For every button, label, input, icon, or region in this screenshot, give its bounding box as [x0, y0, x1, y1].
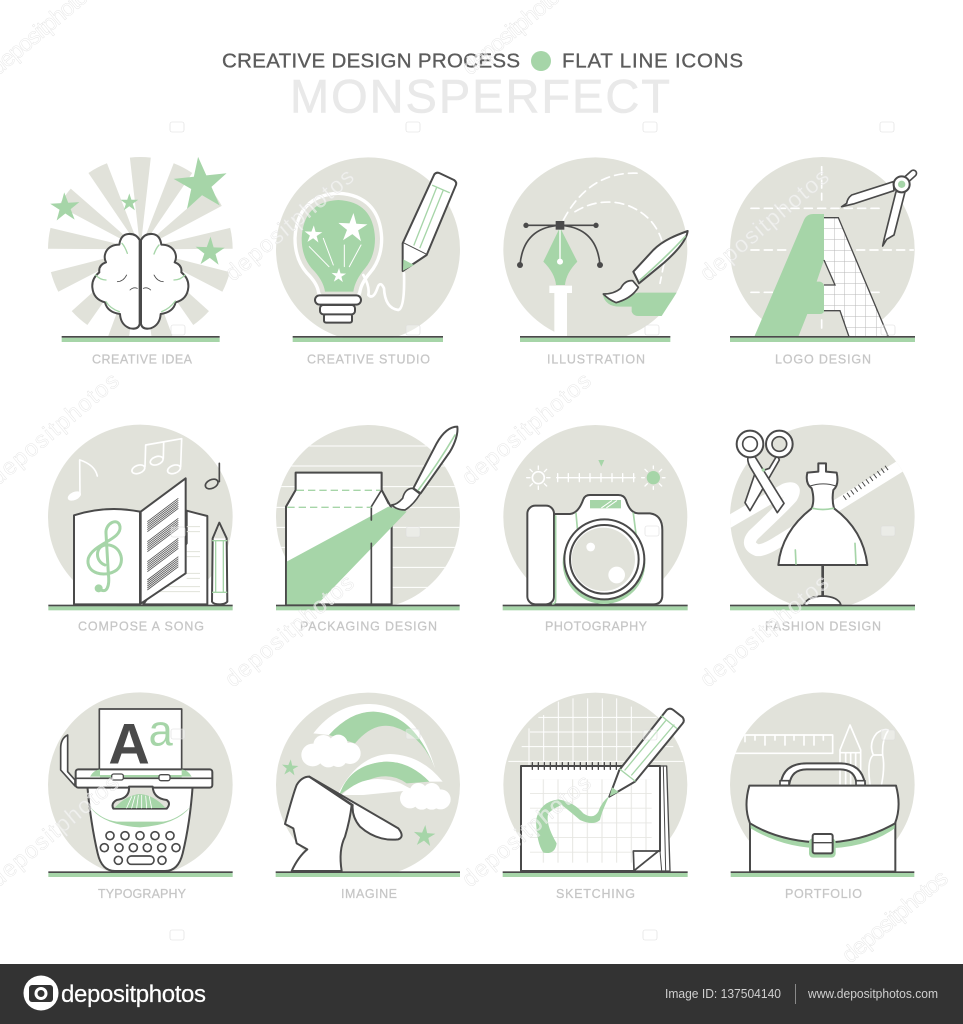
label: creative studio: CREATIVE STUDIO — [307, 352, 430, 366]
label: typography: TYPOGRAPHY — [98, 887, 187, 901]
brand wordmark: depositphotos — [61, 981, 206, 1008]
footer bar — [0, 964, 963, 1024]
title: subtitle line — [222, 50, 743, 72]
ground line — [520, 336, 670, 342]
paper sheet: A — [108, 712, 150, 776]
rainbows — [313, 704, 443, 795]
label: sketching: SKETCHING — [556, 887, 635, 901]
panel: imagine — [276, 693, 460, 877]
panel: compose a song — [48, 425, 233, 610]
green squiggle — [536, 796, 609, 853]
background circle — [276, 157, 460, 341]
label: imagine: IMAGINE — [341, 887, 397, 901]
icon: light bulb — [302, 200, 375, 323]
background circle — [730, 425, 915, 609]
title: subtitle line: FLAT LINE ICONS — [562, 50, 743, 72]
panel: portfolio — [730, 692, 915, 877]
ground line — [293, 336, 443, 342]
ground line — [730, 336, 915, 342]
icon: carton — [286, 473, 407, 604]
watermark: depositphotos — [695, 569, 834, 692]
watermark: depositphotos — [220, 163, 359, 286]
icon: paint brush — [603, 231, 688, 303]
icon: typewriter — [61, 735, 212, 871]
letter A green half — [754, 214, 824, 337]
panel: typography — [48, 692, 233, 877]
ground line — [503, 871, 688, 877]
watermark: depositphotos — [457, 769, 596, 892]
ground line — [62, 336, 220, 342]
icon: compass — [842, 173, 913, 246]
label: logo design: LOGO DESIGN — [775, 352, 871, 366]
panel: sketching — [503, 693, 688, 877]
stars — [50, 154, 230, 265]
dashed arcs — [563, 173, 664, 283]
tape measure — [723, 460, 910, 550]
exposure scale — [527, 460, 665, 489]
music notes — [66, 439, 220, 503]
background circle — [730, 692, 915, 877]
ruler, pencil and brush outlines — [730, 725, 888, 784]
panel: creative studio — [276, 157, 460, 342]
brain — [92, 234, 188, 329]
panel: fashion design — [723, 425, 915, 610]
paint stroke — [603, 293, 677, 316]
sunburst rays — [47, 157, 233, 341]
background circle with grid — [503, 692, 688, 839]
icon: pencil — [212, 523, 227, 604]
cord — [363, 273, 404, 310]
ground line — [48, 871, 233, 877]
icon: scissors — [737, 431, 793, 513]
icon: paint brush — [392, 427, 458, 510]
label: creative idea: CREATIVE IDEA — [92, 352, 193, 366]
guide lines — [751, 167, 913, 333]
panel: creative idea — [47, 154, 233, 342]
icon: pen nib — [517, 221, 603, 336]
panel: photography — [503, 425, 688, 610]
background circle — [730, 157, 915, 342]
paper sheet: a — [149, 708, 174, 756]
icon: briefcase — [746, 763, 899, 872]
label: packaging design: PACKAGING DESIGN — [300, 620, 437, 634]
icon: song book — [74, 478, 207, 604]
watermark: depositphotos — [220, 569, 359, 692]
icon: pencil — [403, 173, 456, 271]
title: brand name: MONSPERFECT — [290, 70, 670, 122]
ground line — [730, 605, 915, 610]
stars — [281, 759, 436, 846]
icon: treble clef — [88, 522, 121, 592]
icon: camera — [527, 495, 662, 604]
icon: pencil — [609, 709, 684, 797]
watermark: depositphotos — [695, 163, 834, 286]
background circle with stripes — [273, 425, 463, 609]
letter A grid half — [824, 218, 891, 338]
icon: sketch pad — [521, 763, 670, 871]
background circle — [503, 425, 687, 609]
watermark: depositphotos — [837, 864, 953, 968]
ground line — [731, 871, 914, 877]
label: fashion design: FASHION DESIGN — [765, 620, 881, 634]
paper sheet — [99, 708, 182, 776]
icon: depositphotos logo — [24, 976, 58, 1010]
label: illustration: ILLUSTRATION — [547, 352, 645, 366]
background circle — [276, 693, 460, 877]
background circle — [48, 425, 233, 609]
panel: packaging design — [273, 425, 463, 610]
open head — [285, 777, 402, 871]
ground line — [48, 605, 233, 610]
image id: Image ID: 137504140 — [665, 987, 781, 1001]
icon: dress on mannequin — [778, 463, 867, 605]
clouds — [301, 735, 451, 810]
label: portfolio: PORTFOLIO — [785, 887, 862, 901]
ground line — [276, 871, 460, 877]
panel: illustration — [503, 157, 688, 342]
watermark: depositphotos — [457, 367, 596, 490]
ground line — [503, 605, 688, 610]
ground line — [276, 605, 460, 610]
background circle — [503, 157, 687, 341]
website: www.depositphotos.com — [807, 987, 938, 1001]
label: compose a song: COMPOSE A SONG — [78, 620, 204, 634]
label: photography: PHOTOGRAPHY — [545, 620, 648, 634]
background circle — [48, 692, 233, 877]
panel: logo design — [730, 157, 915, 342]
title: subtitle line: CREATIVE DESIGN PROCESS — [222, 50, 520, 72]
